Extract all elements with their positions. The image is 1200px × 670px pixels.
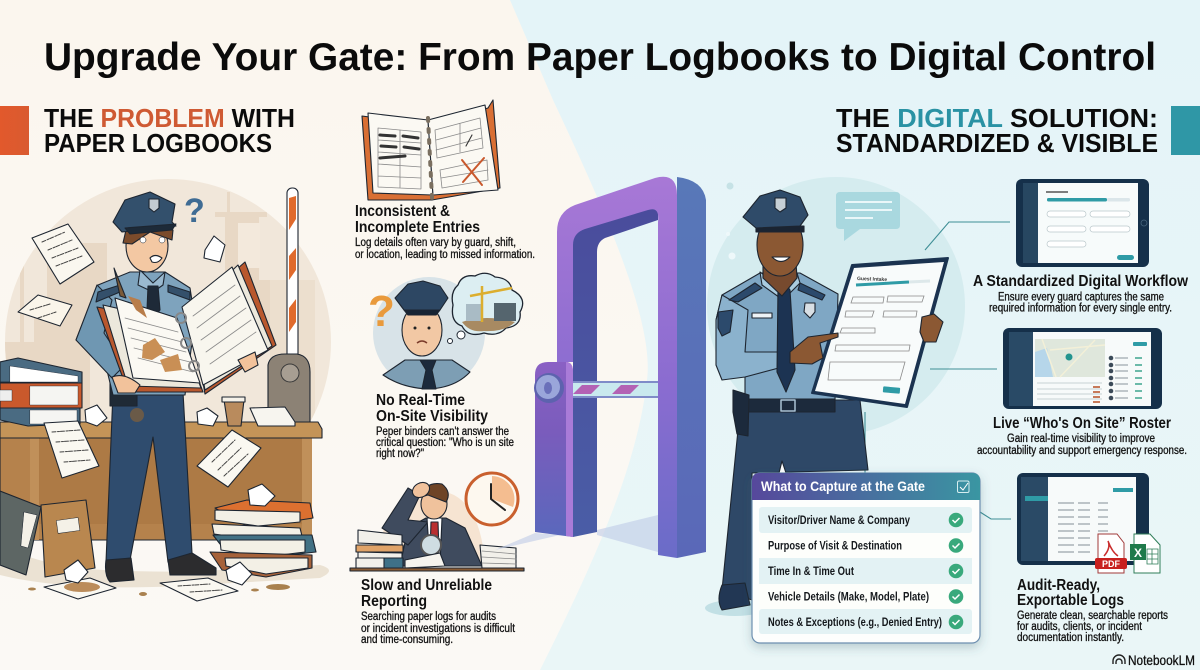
chat bubble icon xyxy=(836,192,900,241)
description: slow reporting: Searching paper logs for audits xyxy=(361,611,496,623)
arch front face xyxy=(557,177,677,558)
barrier post block xyxy=(535,362,573,537)
row 3 xyxy=(759,558,972,584)
tablet: Guest Intake xyxy=(857,276,887,283)
illustration: purple gate arch with barrier xyxy=(495,177,706,558)
item: slow reporting xyxy=(350,473,524,646)
row 5 xyxy=(759,609,972,634)
description: workflow: Ensure every guard captures the same xyxy=(998,292,1164,304)
description: inconsistent: Log details often vary by guard, shift, xyxy=(355,237,516,249)
belt and holster xyxy=(733,390,835,436)
row 1 xyxy=(759,507,972,533)
icon: PDF file: PDF xyxy=(1102,559,1121,569)
connectors xyxy=(865,222,1011,519)
icon: confused guard with thought bubble xyxy=(368,273,523,389)
legs and trousers xyxy=(106,380,216,582)
card body xyxy=(752,473,980,643)
description: no real-time: right now?" xyxy=(376,448,424,460)
coffee cup and papers on desk xyxy=(85,397,295,426)
icon: Excel file: X xyxy=(1134,546,1142,560)
icon: confused guard with thought bubble: ? xyxy=(368,287,395,336)
barrier post xyxy=(268,188,310,425)
icon: NotebookLM mark xyxy=(1113,655,1125,664)
text: inconsistent: Incomplete Entries xyxy=(355,219,480,236)
text: no real-time: No Real-Time xyxy=(376,392,465,409)
barrier highlight strip xyxy=(566,362,573,537)
description: workflow: required information for every single entry. xyxy=(989,302,1172,314)
icon: Excel file xyxy=(1130,534,1160,573)
guard torso and arms xyxy=(76,270,195,395)
floor papers and stains xyxy=(28,560,290,601)
description: no real-time: Peper binders can't answer the xyxy=(376,426,509,438)
card title: What to Capture at the Gate xyxy=(761,478,925,494)
arch blue side xyxy=(677,177,706,558)
description: audit: Generate clean, searchable reports xyxy=(1017,610,1168,622)
feature: audit-ready logs xyxy=(1017,473,1168,644)
problem heading text: PAPER LOGBOOKS xyxy=(44,128,272,158)
trousers xyxy=(719,400,868,610)
panel: problem heading xyxy=(0,103,295,158)
description: inconsistent: or location, leading to missed information. xyxy=(355,249,535,261)
description: roster: Gain real-time visibility to improve xyxy=(1007,433,1155,445)
icon: header checkbox xyxy=(958,481,969,492)
question mark: ? xyxy=(184,192,205,230)
barrier pivot xyxy=(534,373,564,403)
teal accent block xyxy=(1171,106,1200,155)
problem heading text: THE PROBLEM WITH xyxy=(44,103,298,133)
desk xyxy=(0,422,329,587)
text: inconsistent: Inconsistent & xyxy=(355,203,450,220)
barrier arm xyxy=(558,381,658,398)
tablet: map and roster screen xyxy=(1003,328,1162,409)
pointing hand xyxy=(790,314,943,364)
text: slow reporting: Reporting xyxy=(361,593,427,610)
arch inner dark side xyxy=(573,206,658,537)
description: slow reporting: and time-consuming. xyxy=(361,634,453,646)
decorative dots xyxy=(726,182,736,260)
description: no real-time: critical question: "Who is un site xyxy=(376,437,514,449)
ground shadow xyxy=(495,515,658,552)
icon: marked-up logbook xyxy=(362,100,500,200)
illustration: stressed guard with paper logbooks xyxy=(0,170,340,601)
brand: NotebookLM xyxy=(1113,652,1195,668)
title: Upgrade Your Gate: From Paper Logbooks to Digital Control xyxy=(44,36,1156,79)
icon: stressed worker with clock xyxy=(350,473,524,571)
row 2 xyxy=(759,533,972,558)
tablet: form screen xyxy=(1016,179,1149,267)
shirt and arm xyxy=(716,272,838,400)
panel: what to capture checklist xyxy=(752,473,980,643)
item: inconsistent entries xyxy=(355,100,535,261)
guard head and cap xyxy=(113,192,176,272)
row 5: Notes & Exceptions (e.g., Denied Entry) xyxy=(768,617,942,629)
backdrop circle and skyline xyxy=(5,179,331,422)
tablet xyxy=(812,258,948,407)
card header xyxy=(752,473,980,500)
row 4 xyxy=(759,584,972,609)
folders on floor xyxy=(0,491,95,577)
text: audit title: Exportable Logs xyxy=(1017,592,1124,609)
shoe shadow xyxy=(705,600,765,616)
row 1: Visitor/Driver Name & Company xyxy=(768,515,910,527)
solution heading text: STANDARDIZED & VISIBLE xyxy=(836,128,1158,158)
orange accent block xyxy=(0,106,29,155)
text: slow reporting: Slow and Unreliable xyxy=(361,577,492,594)
illustration: smiling guard with tablet xyxy=(705,190,948,616)
floating papers xyxy=(18,224,261,487)
text: no real-time: On-Site Visibility xyxy=(376,408,488,425)
row 3: Time In & Time Out xyxy=(768,566,854,578)
description: audit: for audits, clients, or incident xyxy=(1017,621,1143,633)
book stack on floor xyxy=(210,484,316,577)
description: audit: documentation instantly. xyxy=(1017,632,1124,644)
solution heading text: THE DIGITAL SOLUTION: xyxy=(836,103,1153,133)
head and cap xyxy=(743,190,808,296)
row 4: Vehicle Details (Make, Model, Plate) xyxy=(768,592,929,604)
feature: standardized workflow xyxy=(973,179,1189,314)
feature: live roster xyxy=(977,328,1187,457)
text: audit title: Audit-Ready, xyxy=(1017,577,1100,594)
tablet: logs table screen xyxy=(1017,473,1149,565)
backdrop circle: digital guard xyxy=(707,177,965,435)
row 2: Purpose of Visit & Destination xyxy=(768,540,902,552)
icon: PDF file xyxy=(1095,534,1127,573)
panel: solution heading xyxy=(836,103,1200,158)
open binder logbook xyxy=(97,262,276,394)
item: no real-time visibility xyxy=(368,273,523,460)
stacked binders on desk xyxy=(0,358,82,426)
description: slow reporting: or incident investigations is difficult xyxy=(361,623,516,635)
